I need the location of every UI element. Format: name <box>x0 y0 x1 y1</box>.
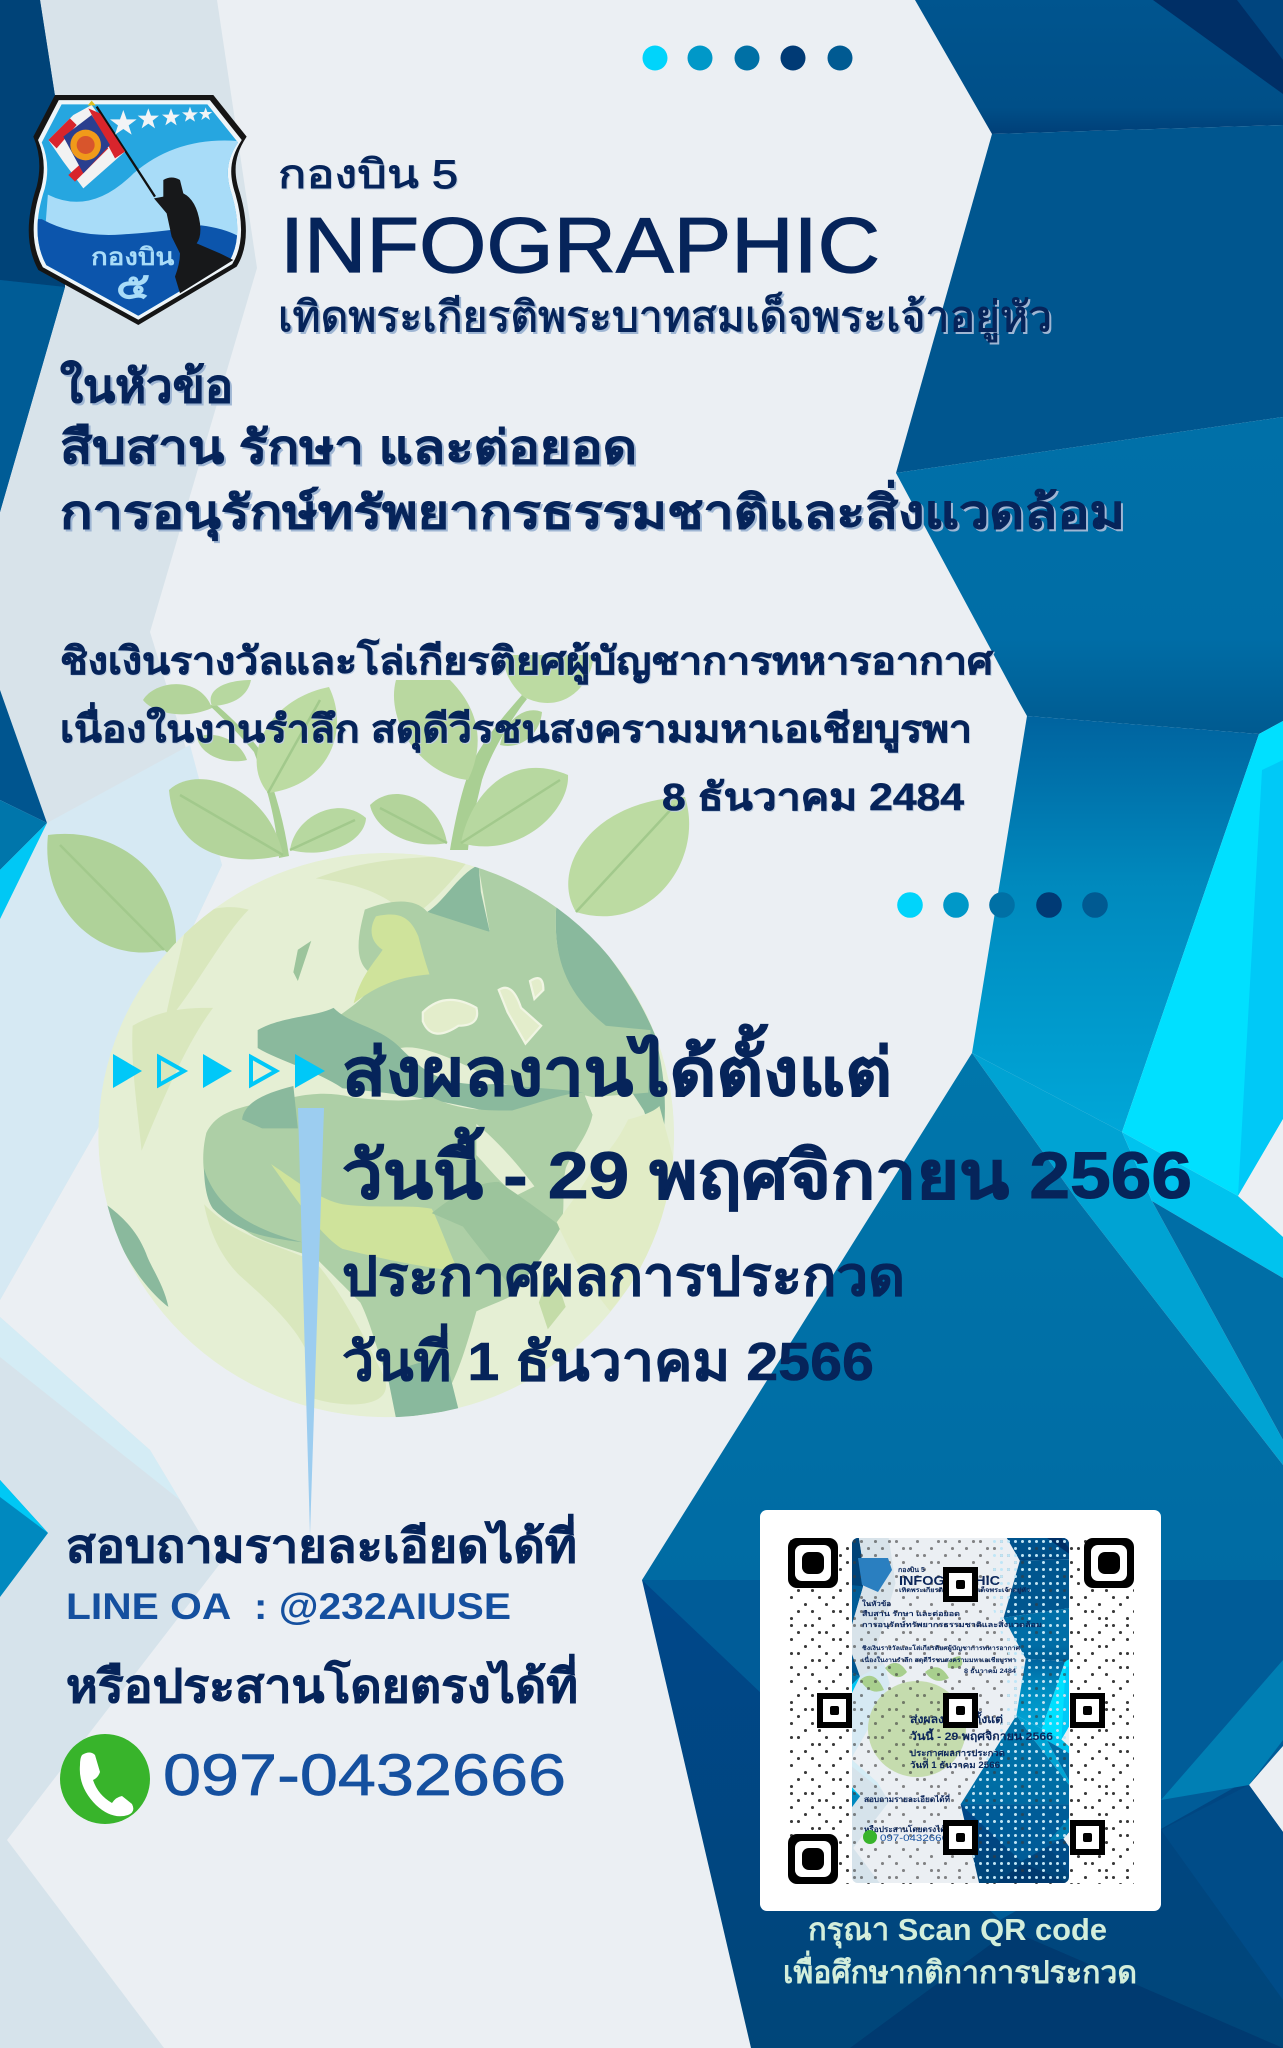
heading: topic block: สืบสาน รักษา และต่อยอด <box>60 421 637 473</box>
text block: submission deadline <box>342 1023 1192 1212</box>
QR thumbnail logo <box>858 1558 892 1592</box>
text block: submission deadline: วันนี้ - 29 พฤศจิกายน 2566 <box>342 1126 1192 1212</box>
QR centre thumbnail: วันนี้ - 29 พฤศจิกายน 2566 <box>910 1728 1053 1743</box>
QR centre thumbnail: การอนุรักษ์ทรัพยากรธรรมชาติและสิ่งแวดล้อม <box>862 1619 1042 1629</box>
QR centre thumbnail: 097-0432666 <box>880 1833 948 1843</box>
text block: submission deadline: ส่งผลงานได้ตั้งแต่ <box>342 1023 892 1109</box>
text block: contact: LINE OA : @232AIUSE <box>66 1586 511 1627</box>
text block: contact <box>66 1514 578 1712</box>
icon: row of triangles <box>113 1054 325 1088</box>
QR alignment squares <box>817 1567 1105 1855</box>
QR centre thumbnail <box>852 1538 1069 1883</box>
icon: squadron shield logo <box>29 90 250 330</box>
caption: scan QR code: กรุณา Scan QR code <box>808 1912 1107 1949</box>
subtitle: เทิดพระเกียรติพระบาทสมเด็จพระเจ้าอยู่หัว <box>278 292 1052 342</box>
heading: topic block: ในหัวข้อ <box>60 359 233 412</box>
QR centre thumbnail: สืบสาน รักษา และต่อยอด <box>862 1610 961 1618</box>
QR centre thumbnail: INFOGRAPHIC <box>899 1573 1001 1588</box>
QR centre thumbnail: เทิดพระเกียรติพระบาทสมเด็จพระเจ้าอยู่หัว <box>899 1585 1031 1595</box>
text block: contact: หรือประสานโดยตรงได้ที่ <box>66 1654 578 1712</box>
stars <box>110 107 212 135</box>
title: INFOGRAPHIC: INFOGRAPHIC <box>280 201 880 289</box>
logo text: กองบิน <box>91 244 175 271</box>
QR centre thumbnail: 8 ธันวาคม 2484 <box>964 1667 1017 1675</box>
silhouette <box>154 177 233 293</box>
logo text: ๕ <box>116 265 150 306</box>
text block: results date: วันที่ 1 ธันวาคม 2566 <box>342 1323 874 1392</box>
flag <box>48 101 155 197</box>
QR centre thumbnail: สอบถามรายละเอียดได้ที่ <box>864 1793 950 1804</box>
QR centre thumbnail: เนื่องในงานรำลึก สดุดีวีรชนสงครามมหาเอเชียบูรพา <box>862 1655 1016 1665</box>
decorative needle line <box>298 1108 324 1535</box>
heading: topic block <box>60 359 1125 541</box>
icon: sprouts and leaves <box>47 655 689 959</box>
QR centre thumbnail: วันที่ 1 ธันวาคม 2566 <box>910 1758 1000 1770</box>
middle dots row <box>897 892 1108 918</box>
caption: scan QR code: เพื่อศึกษากติกาการประกวด <box>783 1950 1137 1990</box>
QR centre thumbnail: ในหัวข้อ <box>862 1599 891 1608</box>
QR centre thumbnail: กองบิน 5 <box>898 1566 925 1574</box>
icon: green globe <box>98 853 675 1419</box>
heading: squadron name: กองบิน 5 <box>278 153 458 197</box>
QR centre thumbnail: ส่งผลงานได้ตั้งแต่ <box>910 1711 1003 1726</box>
text block: award and occasion: 8 ธันวาคม 2484 <box>662 777 964 819</box>
QR module dots <box>788 1538 1134 1884</box>
text block: results date <box>342 1247 905 1392</box>
panel: QR code card <box>760 1510 1161 1911</box>
text block: results date: ประกาศผลการประกวด <box>342 1247 905 1307</box>
caption: scan QR code <box>783 1912 1137 1990</box>
phone number: 097-0432666 <box>163 1743 566 1808</box>
QR centre thumbnail: ชิงเงินรางวัลและโล่เกียรติยศผู้บัญชาการทหารอากาศ <box>862 1644 1020 1653</box>
heading: topic block: การอนุรักษ์ทรัพยากรธรรมชาติและสิ่งแวดล้อม <box>60 480 1125 541</box>
QR finder squares <box>788 1538 1134 1884</box>
top dots row <box>642 46 852 70</box>
text block: award and occasion <box>60 638 994 819</box>
QR centre thumbnail: ประกาศผลการประกวด <box>910 1748 1005 1758</box>
text block: award and occasion: ชิงเงินรางวัลและโล่เกียรติยศผู้บัญชาการทหารอากาศ <box>60 638 994 685</box>
text block: contact: สอบถามรายละเอียดได้ที่ <box>66 1514 577 1572</box>
QR centre thumbnail: หรือประสานโดยตรงได้ที่ <box>864 1823 951 1834</box>
text block: award and occasion: เนื่องในงานรำลึก สดุดีวีรชนสงครามมหาเอเชียบูรพา <box>60 702 972 753</box>
icon: phone <box>60 1734 150 1824</box>
logo text <box>91 244 175 306</box>
